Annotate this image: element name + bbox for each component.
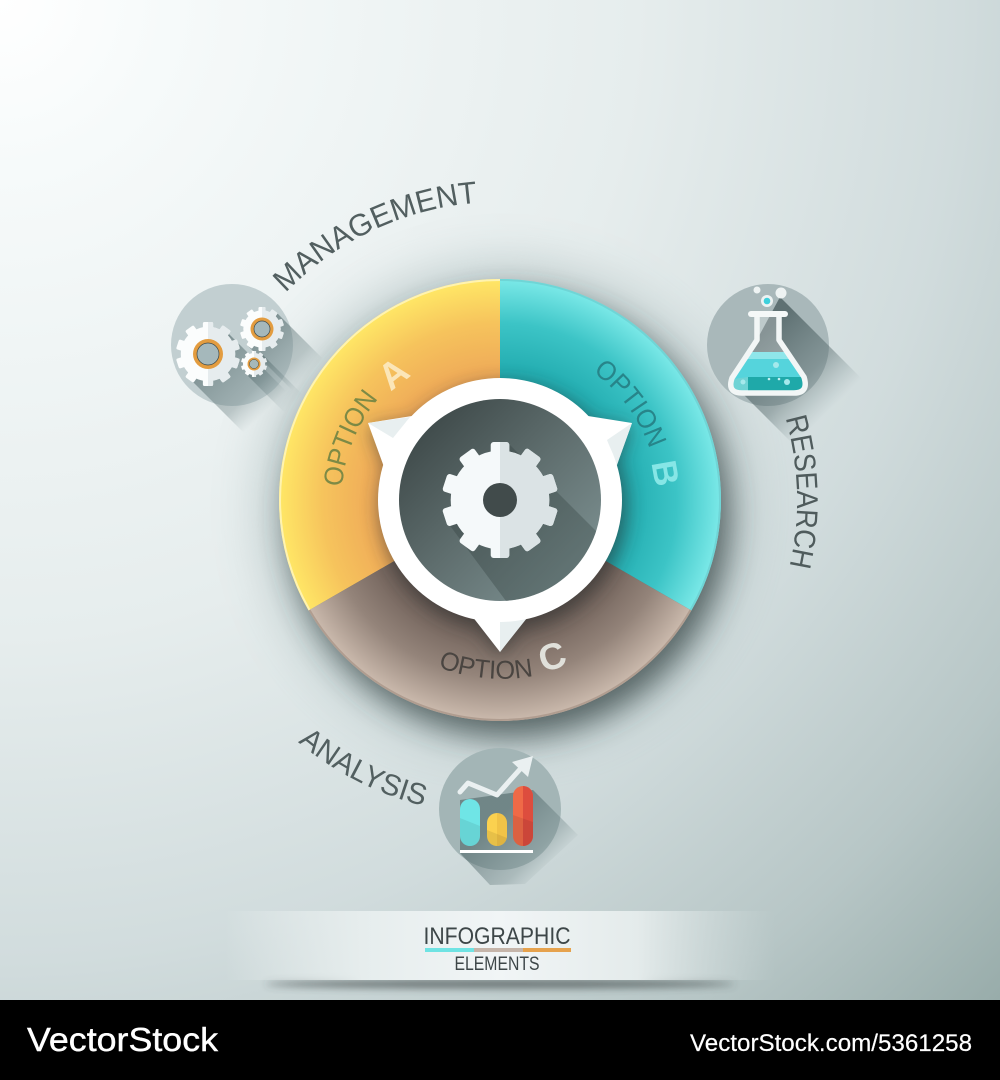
main wheel xyxy=(241,244,761,764)
hub pointers xyxy=(368,416,632,652)
banner title: INFOGRAPHIC xyxy=(424,923,570,950)
medium gear xyxy=(240,307,284,351)
gear long shadows xyxy=(187,314,324,433)
bar: cyan xyxy=(460,799,480,846)
bar: yellow xyxy=(487,813,507,846)
icon: research flask xyxy=(707,284,862,446)
segment: option C xyxy=(309,500,691,721)
rim highlights xyxy=(280,280,720,720)
banner xyxy=(225,911,775,988)
flask long shadow xyxy=(733,297,862,446)
bar: red xyxy=(513,786,533,846)
trend arrow xyxy=(460,756,533,795)
label: option B xyxy=(597,361,686,489)
center hub xyxy=(368,378,632,658)
watermark logo: VectorStock xyxy=(27,1021,219,1058)
label: option A: A xyxy=(370,349,417,398)
heading: analysis: ANALYSIS xyxy=(298,731,426,804)
label: option B: OPTION xyxy=(597,361,666,447)
flask glass xyxy=(731,316,805,393)
label: option C: OPTION xyxy=(441,652,532,679)
long shadow of center gear xyxy=(450,445,596,601)
label: option C xyxy=(441,633,571,680)
banner subtitle: ELEMENTS xyxy=(454,954,540,975)
label: option A xyxy=(324,349,417,485)
flask cap xyxy=(748,311,788,317)
watermark bar xyxy=(0,1000,1000,1080)
small gear xyxy=(241,351,267,377)
liquid xyxy=(732,352,804,391)
bubbles xyxy=(754,286,786,307)
icon: analysis chart xyxy=(439,748,578,885)
heading: research: RESEARCH xyxy=(786,415,818,568)
white ring xyxy=(378,378,622,622)
segment: option A xyxy=(279,279,500,610)
icon: management gears xyxy=(171,284,324,433)
icon: center gear xyxy=(442,442,558,558)
big gear xyxy=(176,322,240,386)
watermark url: VectorStock.com/5361258 xyxy=(690,1030,972,1057)
label: option C: C xyxy=(533,633,571,680)
dark dial xyxy=(399,399,601,601)
segment: option B xyxy=(500,279,721,610)
label: option A: OPTION xyxy=(324,389,377,485)
chart long shadow xyxy=(460,790,578,885)
tri-colour rule xyxy=(425,948,571,952)
label: option B: B xyxy=(644,457,686,489)
heading: management: MANAGEMENT xyxy=(272,182,476,292)
chart baseline xyxy=(460,850,533,853)
